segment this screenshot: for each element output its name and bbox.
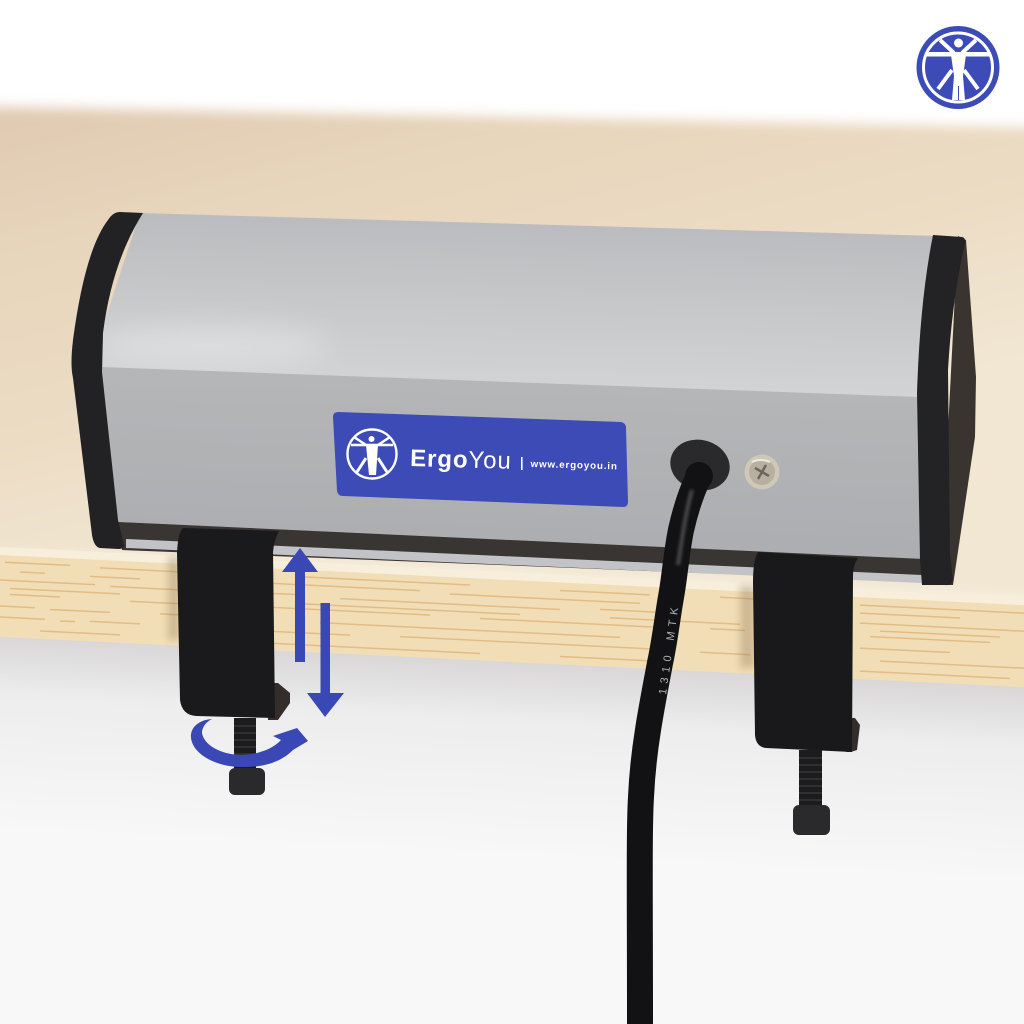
right clamp bolt — [793, 750, 830, 835]
left clamp band — [177, 528, 279, 718]
right clamp band — [753, 552, 858, 752]
wall below the desk — [0, 630, 1024, 1024]
silver body upper face — [100, 213, 938, 398]
left clamp lip — [268, 683, 290, 720]
right clamp lip — [846, 718, 860, 752]
left clamp bolt — [229, 718, 265, 795]
label logo icon — [348, 430, 396, 478]
clamp shadows on desk edge — [168, 556, 755, 668]
right clamp bracket — [753, 552, 860, 835]
cable grommet — [665, 433, 735, 497]
logo badge — [916, 26, 1000, 109]
screw — [744, 454, 780, 490]
label website: www.ergoyou.in — [529, 459, 618, 472]
metal mounting plate — [126, 539, 922, 583]
silver highlight — [90, 325, 330, 365]
silver body lower face — [100, 367, 924, 559]
power cable — [640, 433, 735, 1024]
right end cap side face — [940, 236, 976, 585]
power unit housing — [72, 212, 976, 585]
left clamp bracket — [177, 528, 290, 795]
desk top surface — [0, 106, 1024, 602]
height adjustment arrows — [282, 548, 344, 717]
cable highlight — [678, 490, 692, 565]
label brand name: ErgoYou — [410, 445, 512, 475]
right end cap front face — [917, 235, 965, 585]
rotation arrow — [191, 719, 308, 767]
desk front edge — [0, 547, 1024, 687]
brand label — [333, 412, 628, 507]
cable marking: 1310MTK — [657, 602, 682, 695]
gap shadow under the unit — [118, 520, 925, 582]
label divider — [521, 457, 523, 470]
left end cap — [72, 212, 143, 549]
up arrow — [282, 548, 318, 662]
down arrow — [307, 603, 344, 717]
